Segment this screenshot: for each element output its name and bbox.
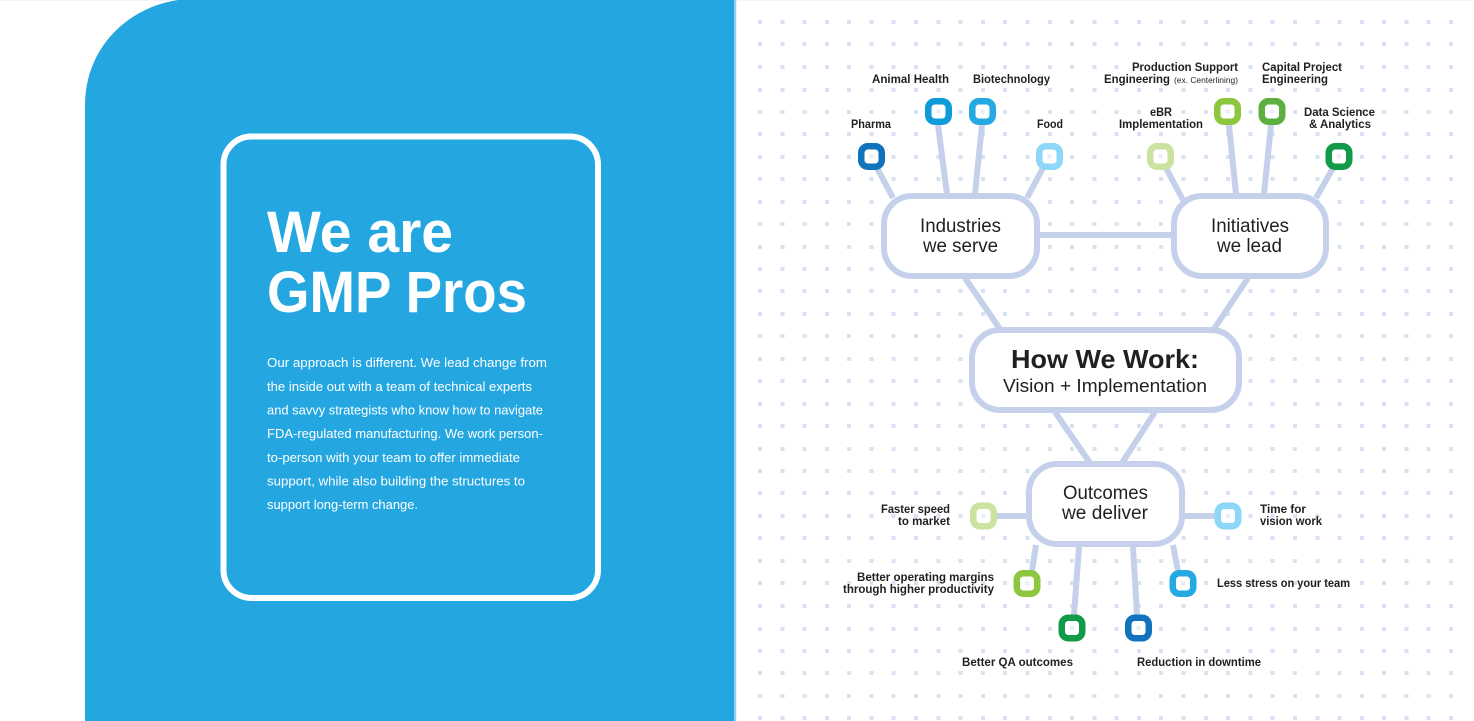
label: better operating margins: through higher productivity [843, 584, 995, 596]
icon: less stress node [1173, 573, 1193, 594]
text block: approach description: support long-term change. [267, 497, 418, 512]
panel: initiatives we lead: we lead [1216, 236, 1282, 257]
label: faster speed to market: Faster speed [881, 504, 950, 516]
label: faster speed to market: to market [898, 516, 950, 528]
icon: QA outcomes node [1062, 618, 1082, 638]
icon: reduction in downtime node [1128, 618, 1149, 638]
panel: industries we serve [884, 196, 1037, 276]
panel: outcomes we deliver: Outcomes [1063, 483, 1148, 504]
panel: how we work: Vision + Implementation [1003, 376, 1207, 396]
label: biotechnology: Biotechnology [973, 74, 1051, 86]
label: reduction in downtime: Reduction in downtime [1137, 657, 1261, 669]
panel: how we work [972, 330, 1239, 410]
label: eBR implementation [1119, 107, 1203, 131]
panel: outcomes we deliver: we deliver [1061, 503, 1149, 524]
label: time for vision work [1260, 504, 1323, 528]
icon: pharma node [861, 146, 882, 167]
panel: industries we serve: Industries [920, 216, 1001, 237]
text block: approach description: Our approach is different. We lead change from [267, 355, 547, 370]
label: production support engineering [1104, 62, 1238, 86]
icon: eBR node [1150, 146, 1171, 167]
title [267, 200, 527, 325]
label: data science and analytics: & Analytics [1309, 119, 1371, 131]
label: time for vision work: vision work [1260, 516, 1323, 528]
title: GMP Pros [267, 260, 527, 325]
label: better operating margins [843, 572, 995, 596]
label: production support engineering: (ex. Centerlining) [1174, 75, 1238, 85]
label: data science and analytics: Data Science [1304, 107, 1375, 119]
title: We are [267, 200, 453, 265]
text block: approach description: FDA-regulated manufacturing. We work person- [267, 426, 543, 441]
text block: approach description: support, while also building the structures to [267, 474, 525, 488]
panel: initiatives we lead [1174, 196, 1326, 276]
panel: initiatives we lead: Initiatives [1211, 216, 1289, 237]
panel: industries we serve: we serve [922, 236, 998, 257]
label: capital project engineering [1262, 62, 1342, 86]
label: pharma: Pharma [851, 119, 892, 131]
label: better QA outcomes: Better QA outcomes [962, 657, 1073, 669]
label: production support engineering: Production Support [1132, 62, 1238, 74]
icon: animal health node [928, 101, 949, 122]
icon: time for vision work node [1218, 506, 1238, 526]
icon: faster speed node [973, 506, 994, 526]
text block: approach description [267, 355, 547, 512]
label: food: Food [1037, 119, 1063, 131]
icon: data science node [1329, 146, 1349, 167]
icon: food node [1039, 146, 1060, 167]
panel: blue left panel [85, 0, 737, 721]
text block: approach description: and savvy strategists who know how to navigate [267, 402, 543, 418]
panel: white outlined text card [224, 136, 598, 598]
chart: how we work mind map [843, 62, 1375, 669]
label: capital project engineering: Capital Project [1262, 62, 1342, 74]
icon: operating margins node [1017, 573, 1037, 594]
label: data science and analytics [1304, 107, 1375, 131]
label: faster speed to market [881, 504, 950, 528]
label: time for vision work: Time for [1260, 504, 1307, 516]
icon: production support node [1217, 101, 1238, 122]
label: eBR implementation: eBR [1150, 107, 1173, 119]
label: capital project engineering: Engineering [1262, 74, 1328, 86]
label: production support engineering: Engineering [1104, 74, 1170, 86]
icon: capital project node [1262, 101, 1282, 122]
label: eBR implementation: Implementation [1119, 119, 1203, 131]
text block: approach description: the inside out with a team of technical experts [267, 379, 532, 394]
text block: approach description: to-person with your team to offer immediate [267, 450, 520, 465]
panel: outcomes we deliver [1029, 464, 1182, 544]
panel: how we work: How We Work: [1011, 344, 1199, 374]
label: better operating margins: Better operating margins [857, 572, 994, 584]
icon: biotechnology node [972, 101, 993, 122]
label: animal health: Animal Health [872, 74, 949, 86]
label: less stress: Less stress on your team [1217, 578, 1350, 590]
